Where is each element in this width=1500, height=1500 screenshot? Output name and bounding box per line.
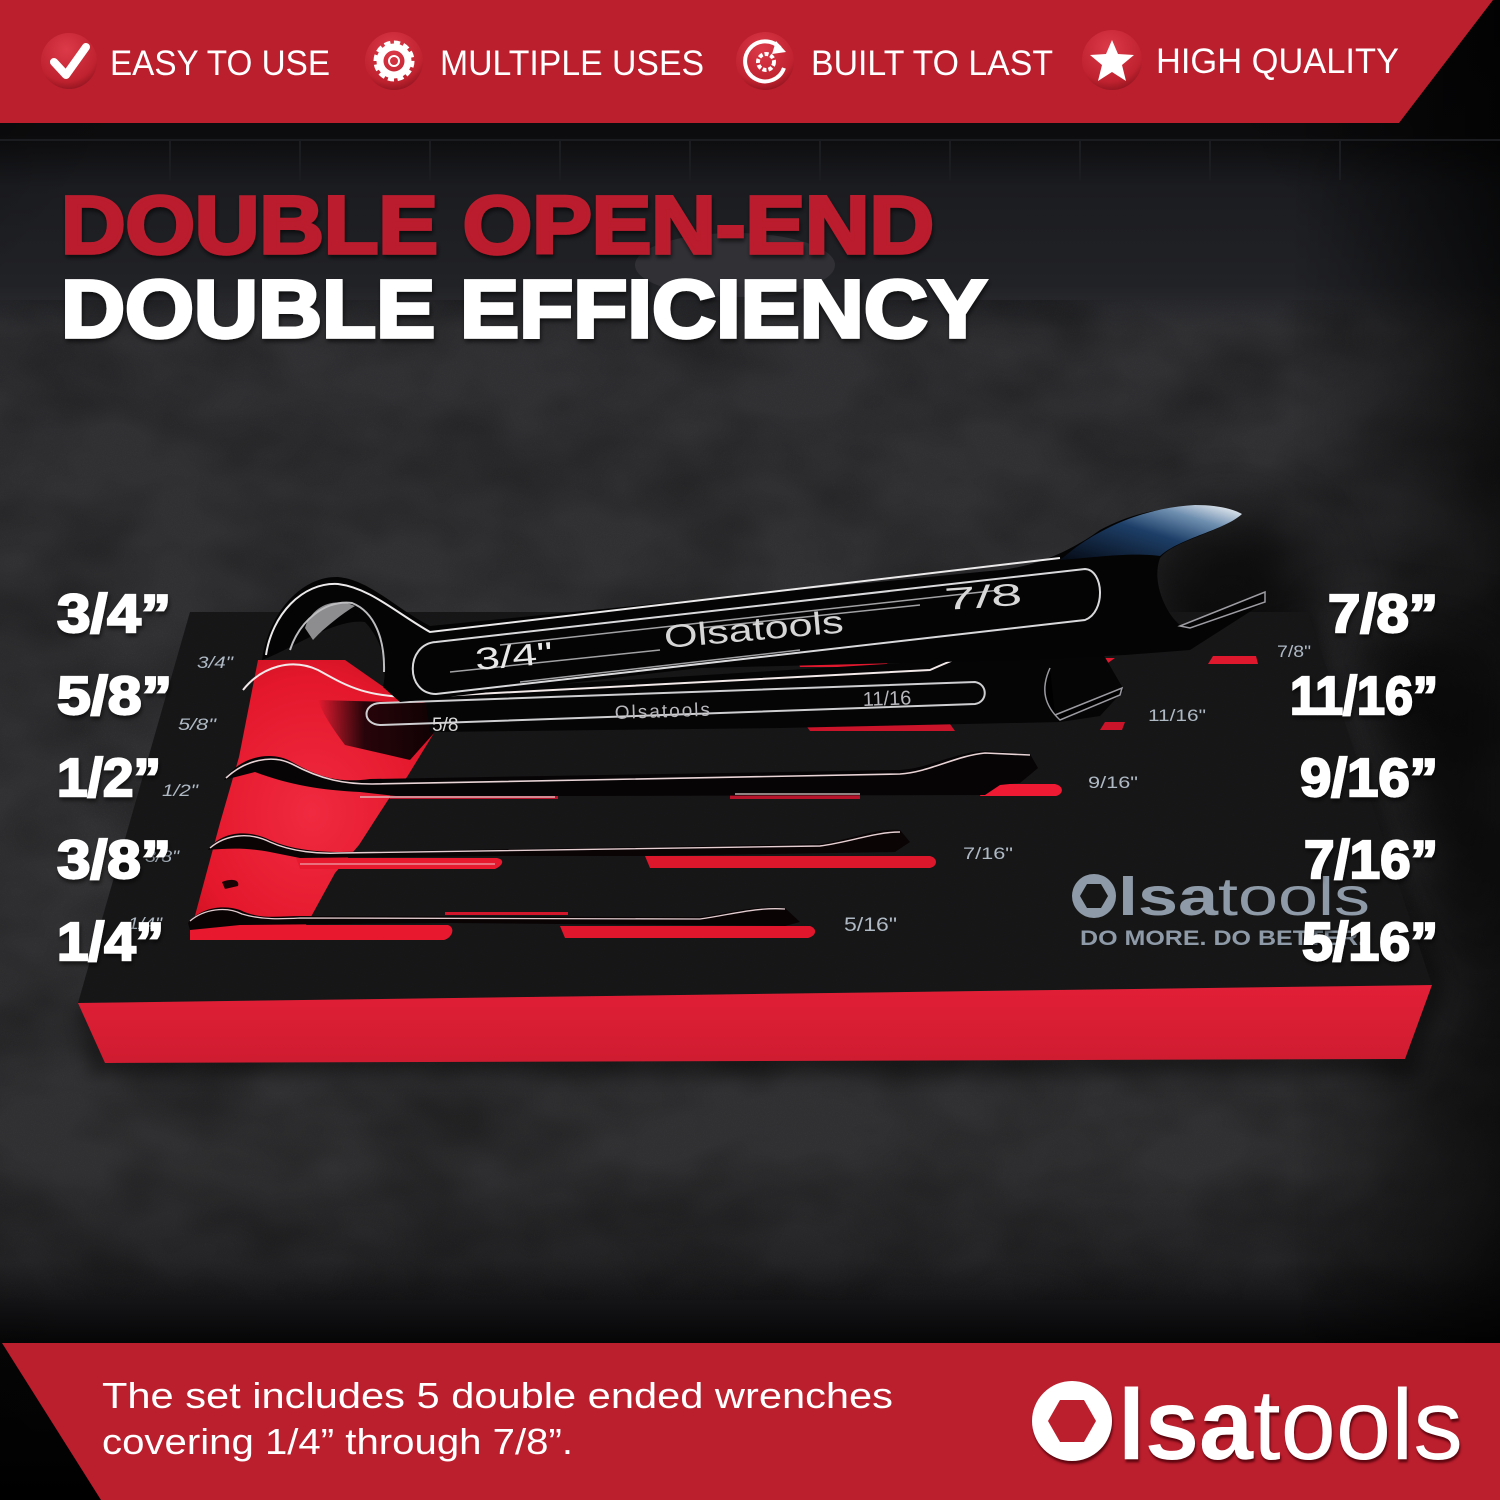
bottom description text: The set includes 5 double ended wrenches (102, 1375, 893, 1416)
side labels: left sizes: 5/8” (57, 666, 172, 726)
logo: Olsatools: lsa (1118, 1369, 1254, 1481)
bottom description text (102, 1375, 893, 1462)
logo: Olsatools: O (1030, 1361, 1114, 1482)
logo: Olsatools: tools (1253, 1369, 1463, 1481)
top banner (0, 0, 1493, 123)
bottom description text: covering 1/4” through 7/8”. (102, 1421, 573, 1462)
side labels: right sizes (1290, 584, 1438, 972)
icon: check (41, 33, 97, 89)
wrench row 5: 1/4 to 5/16 (188, 907, 800, 930)
printed foam size labels: 3/8" (145, 847, 180, 866)
printed foam size labels: 7/16" (963, 844, 1013, 863)
printed foam size labels (128, 642, 1311, 936)
icon: cycle gear (736, 32, 794, 90)
side labels: right sizes: 11/16” (1290, 666, 1438, 726)
foam top face (78, 612, 1432, 1003)
foam red side (78, 985, 1432, 1063)
engraved: Olsatools small: Olsatools (614, 700, 712, 724)
side labels: left sizes: 3/4” (57, 584, 171, 644)
logo: Olsatools (1030, 1361, 1463, 1482)
printed foam size labels: 5/8" (178, 715, 217, 734)
side labels: right sizes: 7/8” (1328, 584, 1438, 644)
printed foam logo (1071, 864, 1370, 950)
side labels: left sizes: 1/2” (57, 748, 161, 808)
engraved: 11/16: 11/16 (862, 687, 912, 711)
feature: built to last: BUILT TO LAST (811, 44, 1053, 83)
printed foam logo: O (1071, 864, 1115, 927)
feature: easy to use: EASY TO USE (110, 44, 330, 83)
printed foam size labels: 5/16" (844, 915, 897, 936)
red foam well and slots (190, 656, 1258, 940)
heading (61, 180, 987, 355)
printed foam size labels: 1/2" (162, 781, 199, 800)
engraved: 7/8: 7/8 (943, 577, 1023, 617)
wrench row 1: 3/4 to 7/8 (262, 505, 1265, 702)
tray shadow (78, 612, 1445, 1075)
icon: star (1082, 30, 1142, 90)
engraved: 5/8: 5/8 (432, 715, 458, 736)
heading: DOUBLE OPEN-END (61, 180, 934, 271)
printed foam size labels: 7/8" (1277, 642, 1311, 661)
icon: gear (365, 32, 423, 90)
side labels: left sizes: 1/4” (57, 912, 164, 972)
printed foam size labels: 1/4" (128, 914, 163, 933)
side labels: right sizes: 7/16” (1304, 830, 1438, 890)
engraved: Olsatools: Olsatools (662, 603, 845, 655)
heading: DOUBLE EFFICIENCY (61, 264, 987, 355)
printed foam size labels: 9/16" (1088, 773, 1138, 792)
wrench row 4: 3/8 to 7/16 (208, 830, 910, 889)
side labels: right sizes: 9/16” (1300, 748, 1438, 808)
side labels: left sizes (57, 584, 172, 972)
side labels: right sizes: 5/16” (1302, 912, 1438, 972)
bottom banner (2, 1343, 1500, 1500)
foam tray (78, 612, 1445, 1075)
feature: multiple uses: MULTIPLE USES (440, 44, 704, 83)
feature: high quality: HIGH QUALITY (1156, 42, 1399, 81)
printed foam logo: lsa (1118, 867, 1219, 927)
engraved: 3/4: 3/4" (474, 635, 554, 677)
foam tagline: DO MORE. DO BETTER. (1080, 927, 1365, 950)
printed foam logo: tools (1218, 867, 1370, 927)
printed foam size labels: 11/16" (1148, 706, 1206, 725)
wrench row 2: 5/8 to 11/16 (243, 628, 1124, 736)
printed foam size labels: 3/4" (197, 653, 234, 672)
wrench row 3: 1/2 to 9/16 (224, 751, 1038, 797)
side labels: left sizes: 3/8” (57, 830, 171, 890)
